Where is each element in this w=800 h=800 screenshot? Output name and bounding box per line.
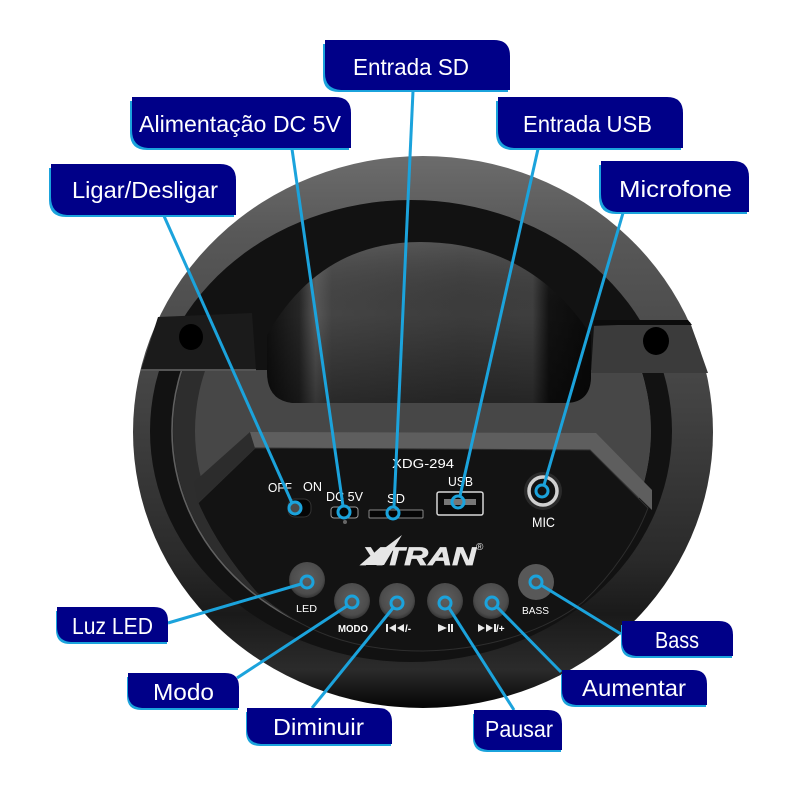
pointer: Alimentação DC 5V [292, 149, 350, 518]
button play pause [427, 583, 463, 632]
callout: Diminuir: Diminuir [273, 714, 364, 740]
rim groove [150, 200, 672, 662]
callout: Bass: Bass [655, 627, 699, 653]
microphone jack: MIC [532, 514, 555, 530]
callout: Microfone: Microfone [619, 176, 732, 202]
button LED: LED [296, 603, 317, 615]
brand logo [359, 535, 484, 571]
pointer: Aumentar [486, 597, 561, 672]
button previous: /- [405, 624, 411, 635]
pointer: Pausar [439, 597, 514, 710]
callout: Ligar/Desligar: Ligar/Desligar [72, 177, 218, 203]
callout: Modo [127, 673, 239, 710]
callout: Aumentar: Aumentar [582, 675, 686, 701]
outer rim [133, 156, 713, 708]
brand logo: XTRAN [359, 543, 477, 571]
model label: XDG-294 [392, 456, 454, 471]
rim highlight [171, 371, 650, 622]
button Bass: BASS [522, 605, 549, 617]
button next [473, 583, 509, 635]
mount block right [591, 320, 708, 373]
callout: Ligar/Desligar [49, 164, 236, 217]
pointer: Ligar/Desligar [164, 216, 301, 514]
button previous [379, 583, 415, 635]
microphone jack [524, 472, 562, 530]
callout: Entrada SD [323, 40, 510, 92]
button LED [289, 562, 325, 615]
brand logo: ® [476, 542, 484, 553]
SD slot: SD [387, 491, 405, 506]
left chevron shade [194, 432, 255, 503]
button Modo: MODO [338, 624, 368, 635]
button Bass [518, 564, 554, 617]
pointer: Diminuir [312, 597, 403, 708]
lower side strip [173, 371, 270, 604]
callout: Luz LED: Luz LED [72, 613, 153, 639]
pointer lines and rings [164, 91, 623, 710]
pointer: Modo [237, 596, 358, 678]
callout: Entrada USB [496, 97, 683, 150]
callout: Diminuir [246, 708, 392, 746]
lower inner disc [195, 370, 651, 498]
handle opening [267, 242, 591, 403]
DC port: DC 5V [326, 489, 363, 504]
callout: Pausar [473, 710, 562, 752]
pointer: Microfone [536, 213, 623, 497]
USB port [437, 474, 483, 515]
callout: Luz LED [56, 607, 168, 644]
pointer: Entrada SD [387, 91, 413, 519]
pointer: Entrada USB [452, 149, 538, 508]
mount block left [141, 313, 256, 370]
pointer: Bass [530, 576, 621, 634]
callout: Pausar: Pausar [485, 716, 553, 742]
button next: /+ [496, 624, 505, 635]
callout: Entrada USB: Entrada USB [523, 111, 652, 137]
power switch [268, 479, 322, 517]
pointer: Luz LED [168, 576, 313, 623]
callout: Aumentar [561, 670, 707, 707]
callout: Alimentação DC 5V [130, 97, 351, 150]
callout: Entrada SD: Entrada SD [353, 54, 469, 80]
SD slot [369, 491, 423, 518]
power switch: ON [303, 479, 322, 494]
callout: Alimentação DC 5V: Alimentação DC 5V [139, 111, 342, 137]
control panel [198, 448, 648, 651]
callout: Microfone [599, 161, 749, 214]
speaker body [133, 156, 713, 708]
grey chevron band [250, 432, 652, 510]
callout: Modo: Modo [153, 679, 214, 705]
power switch: OFF [268, 480, 292, 495]
button Modo [334, 583, 370, 635]
callout: Bass [621, 621, 733, 658]
USB port: USB [448, 474, 473, 489]
DC port [326, 489, 363, 524]
